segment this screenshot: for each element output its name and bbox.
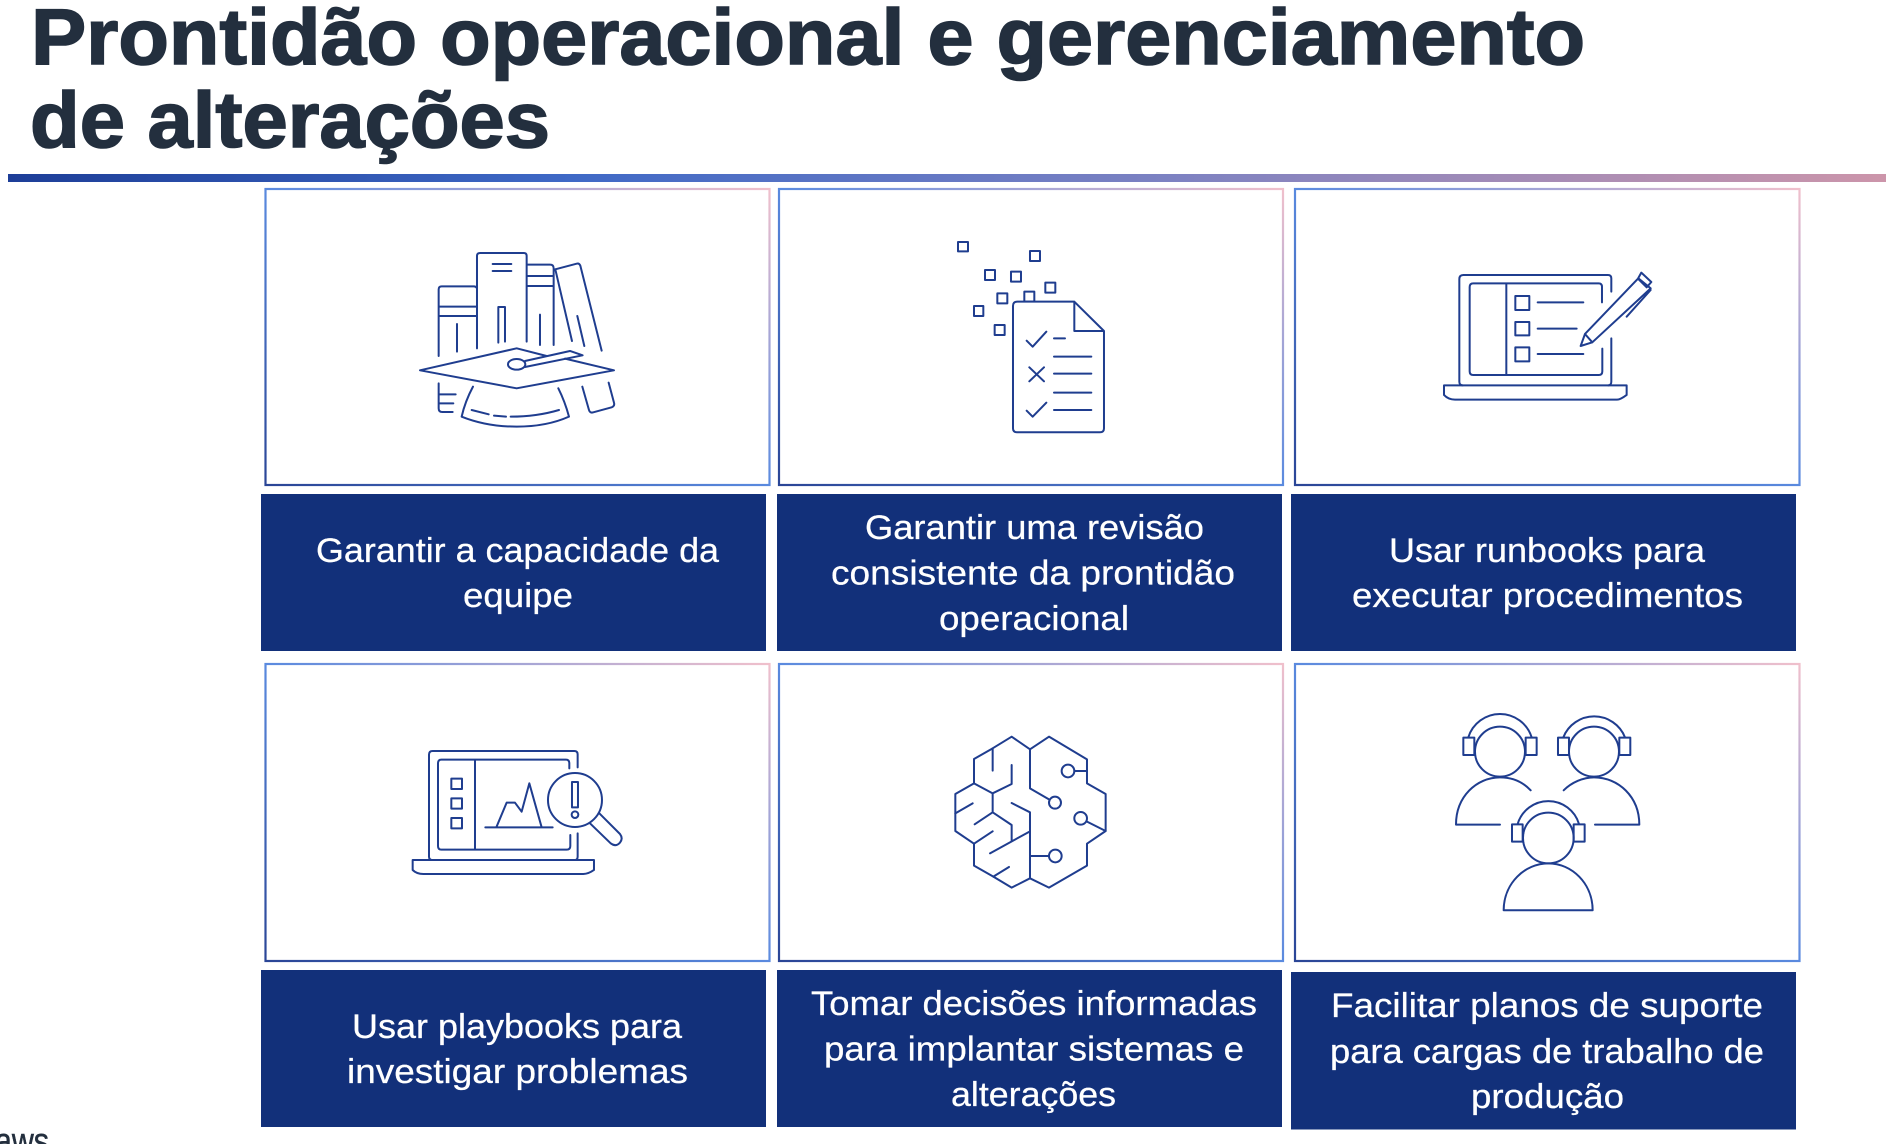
icon: laptop with magnifier and alert xyxy=(413,751,622,874)
icon: checklist document xyxy=(958,242,1104,432)
panel: planos de suporte xyxy=(1291,664,1800,1130)
label: equipe xyxy=(463,577,573,615)
panel: revisão da prontidão operacional xyxy=(777,189,1283,651)
label: consistente da prontidão xyxy=(831,554,1235,592)
panel: usar playbooks xyxy=(261,664,770,1127)
label: Garantir a capacidade da xyxy=(316,532,719,570)
label: Tomar decisões informadas xyxy=(811,985,1257,1023)
icon: circuit brain xyxy=(955,737,1106,888)
label: produção xyxy=(1471,1078,1624,1116)
label: para cargas de trabalho de xyxy=(1330,1033,1764,1071)
icon: laptop with checklist and pencil xyxy=(1444,273,1651,400)
label: executar procedimentos xyxy=(1352,577,1743,615)
panel: decisões informadas xyxy=(777,664,1283,1127)
label: alterações xyxy=(951,1076,1116,1114)
title xyxy=(30,0,1585,164)
title: de alterações xyxy=(30,75,550,164)
title gradient rule xyxy=(8,174,1886,182)
panel: garantir a capacidade da equipe xyxy=(261,189,770,651)
label: Usar runbooks para xyxy=(1389,532,1705,570)
label: Usar playbooks para xyxy=(352,1008,682,1046)
icon: three support agents with headsets xyxy=(1456,714,1639,910)
label: Garantir uma revisão xyxy=(865,509,1204,547)
icon: books and graduation cap xyxy=(420,253,614,427)
label xyxy=(777,970,1282,1127)
label: Facilitar planos de suporte xyxy=(1331,987,1763,1025)
label xyxy=(1291,494,1796,651)
label xyxy=(261,494,766,651)
label: operacional xyxy=(939,600,1129,638)
label xyxy=(261,970,766,1127)
label: para implantar sistemas e xyxy=(824,1030,1244,1068)
label xyxy=(1291,972,1796,1130)
label: investigar problemas xyxy=(347,1053,688,1091)
panel: usar runbooks xyxy=(1291,189,1800,651)
label xyxy=(777,494,1282,651)
